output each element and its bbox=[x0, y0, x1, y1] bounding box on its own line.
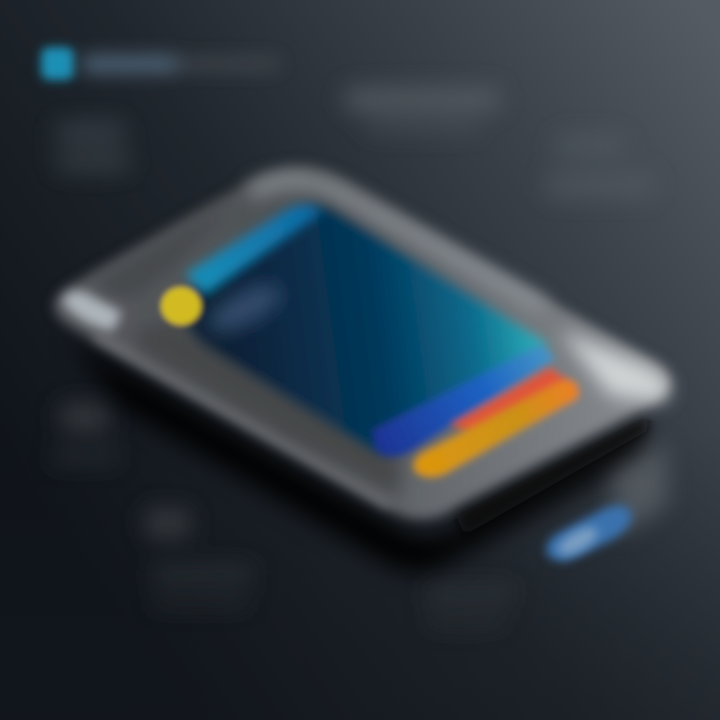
icon: teal logo square bbox=[41, 47, 74, 80]
phone body bbox=[54, 167, 670, 519]
top-left bezel shade bbox=[90, 200, 235, 300]
phone shadow bbox=[70, 340, 650, 571]
orange stripe bbox=[414, 380, 579, 477]
phone bbox=[54, 167, 670, 535]
phone top edge highlight bbox=[255, 180, 540, 305]
white corner glare bbox=[560, 330, 669, 402]
pill highlight bbox=[554, 522, 602, 560]
text block: blurred upper labels bbox=[55, 88, 655, 198]
blue stripe bbox=[372, 345, 556, 457]
phone dark lower edge bbox=[455, 420, 649, 535]
top blue band bbox=[185, 205, 322, 295]
screen left grey-blue blob bbox=[202, 275, 288, 341]
icon: yellow circle bbox=[161, 287, 201, 325]
text block: blurred lower labels bbox=[50, 403, 515, 627]
left corner highlight bbox=[62, 291, 122, 332]
screen bbox=[185, 207, 550, 454]
lower edge highlight bbox=[95, 335, 390, 505]
phone inner panel bbox=[135, 320, 400, 500]
icon: blue pill button bbox=[546, 505, 632, 561]
heading: blurred title bar bbox=[82, 55, 280, 73]
red stripe bbox=[450, 368, 570, 435]
reflection below phone bbox=[610, 440, 668, 535]
